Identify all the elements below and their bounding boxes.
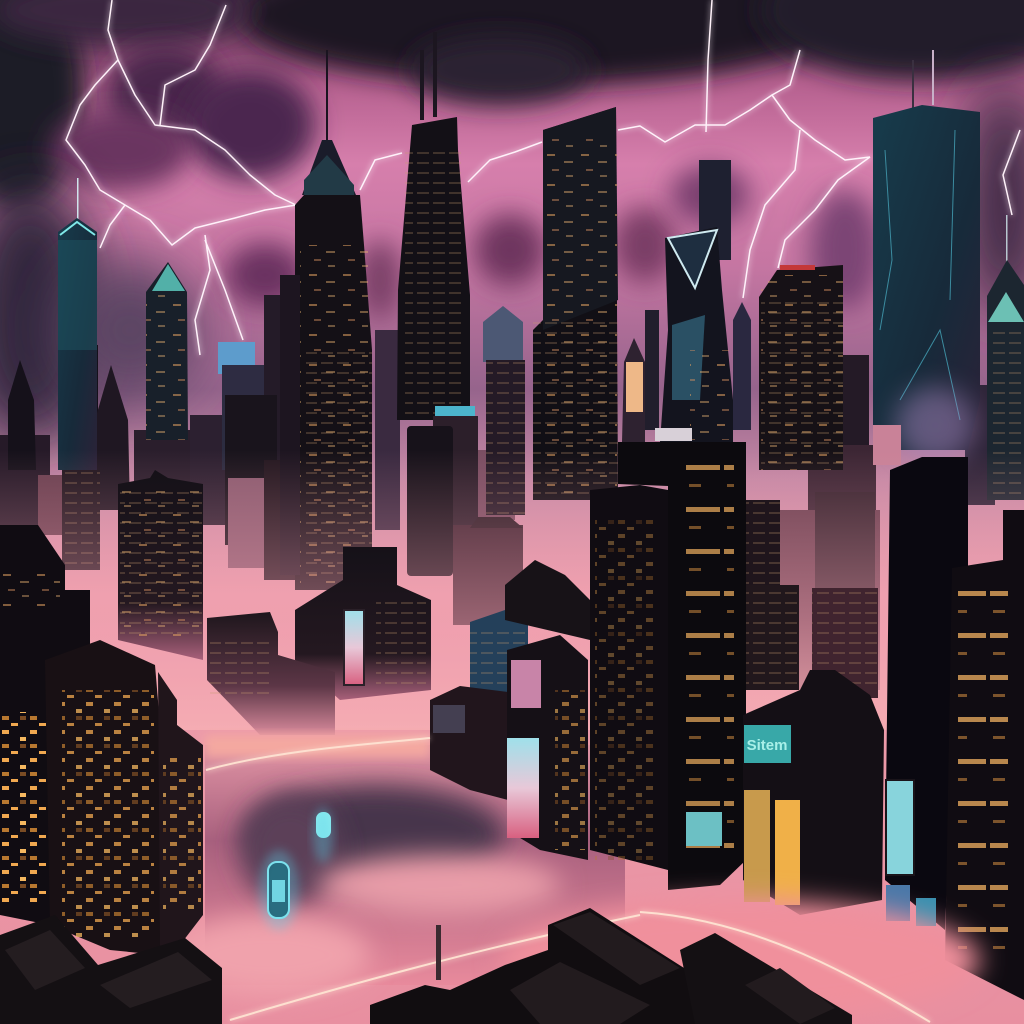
mid building: right of tall	[745, 500, 878, 698]
road light trails	[206, 738, 930, 1022]
near building: main tall pair	[590, 428, 746, 890]
tower: teal crown left	[58, 178, 97, 470]
mid building: office left	[118, 470, 203, 660]
river and fog	[170, 735, 625, 995]
pink mid haze	[0, 450, 1024, 730]
near building: tall black right	[885, 457, 968, 930]
tower: dark mid block	[407, 426, 523, 625]
bottom rooftops right	[370, 908, 852, 1024]
near building: low dark block	[430, 686, 508, 800]
tower: chevron glass	[660, 227, 733, 442]
storm clouds	[0, 0, 1024, 440]
near building: left black cluster	[0, 525, 90, 925]
near building: billboards tower	[507, 635, 588, 860]
tower: central spire	[280, 50, 372, 590]
near building: signage block: Sitem	[747, 737, 787, 754]
tower: slanted glass	[533, 107, 618, 500]
mid building: billboard block	[295, 547, 431, 700]
mid building: pale dome block	[470, 560, 590, 700]
tower: lit office block	[759, 265, 843, 470]
left cluster towers	[38, 342, 264, 570]
near building: signage block	[743, 670, 884, 915]
tower: pagoda crown far right	[987, 215, 1024, 500]
near building: far right office	[945, 510, 1024, 1000]
tower: small lit spire	[622, 338, 645, 442]
bottom rooftops left	[0, 915, 222, 1024]
lightning bolts	[66, 0, 1020, 355]
tower: twin antenna	[397, 32, 478, 526]
tower: tall teal glass right	[873, 50, 980, 465]
tower: green peak	[146, 262, 188, 440]
mid building: low stepped block	[207, 612, 335, 735]
tower: pale blue block	[483, 306, 525, 515]
bottom fog	[500, 900, 980, 1020]
near building: narrow left	[158, 672, 203, 950]
floating beacon cylinders	[259, 807, 333, 930]
near building: left orange office	[45, 640, 160, 955]
far skyline	[0, 160, 995, 690]
